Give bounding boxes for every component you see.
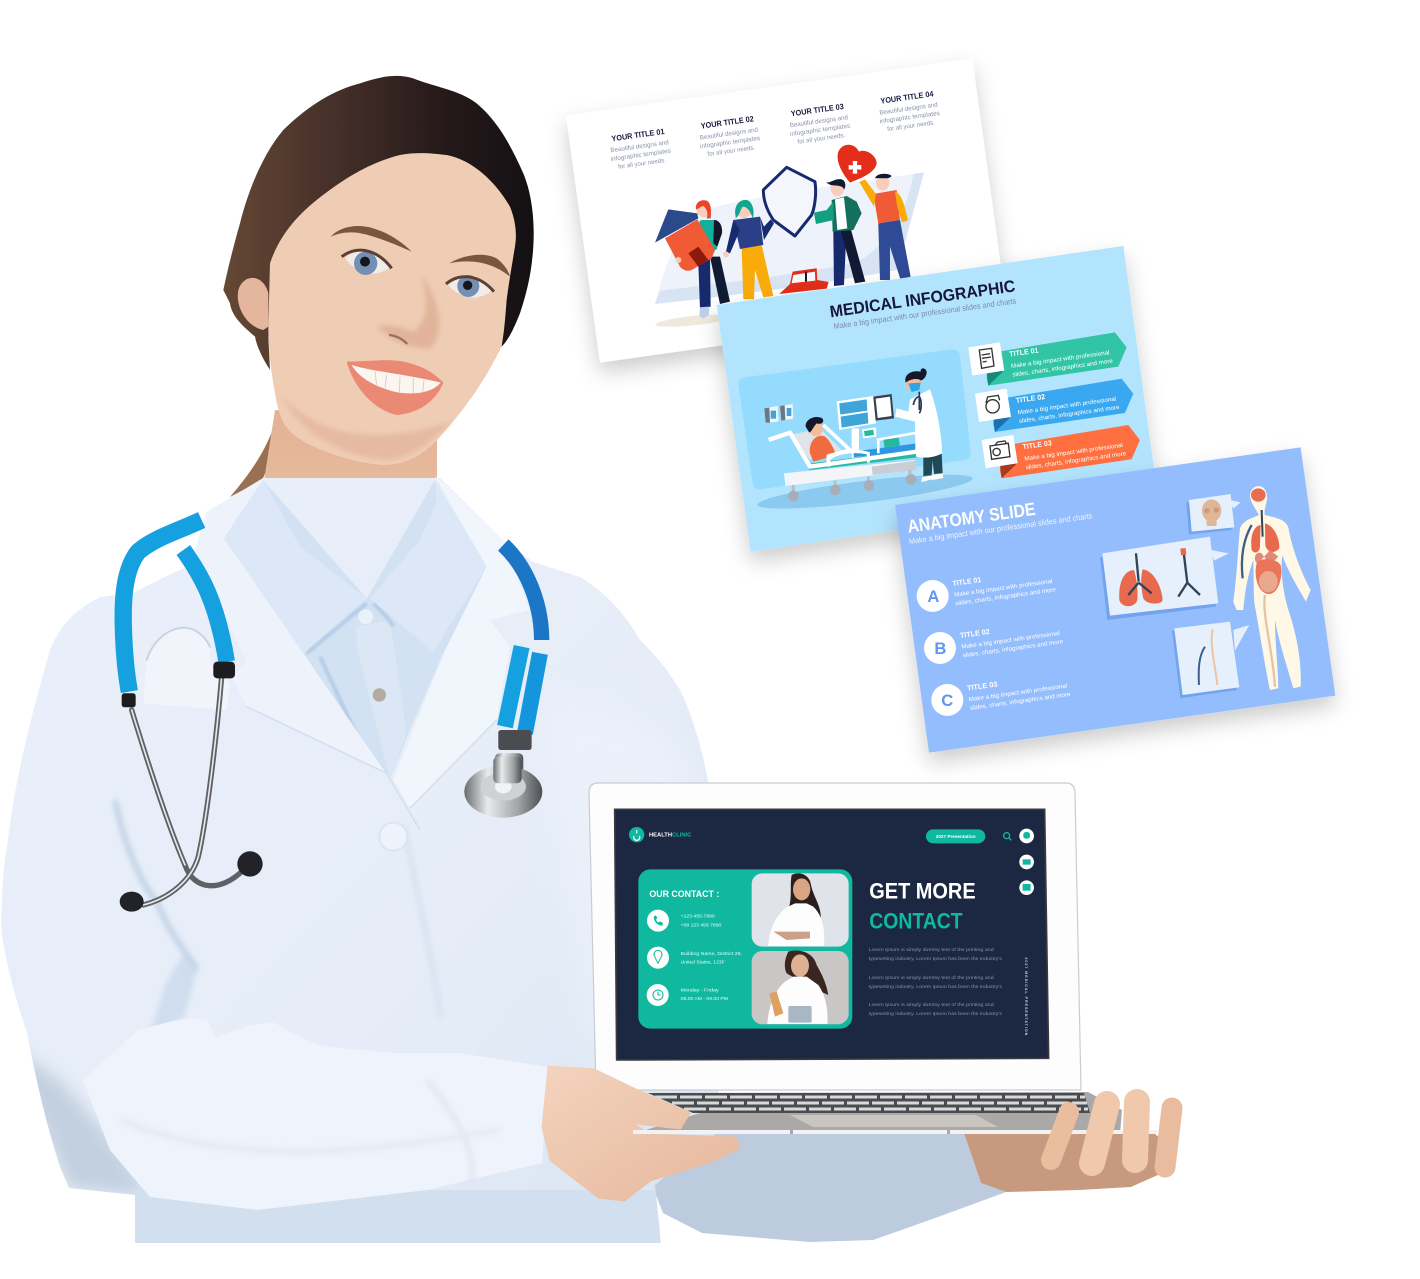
icon: phone <box>647 910 669 932</box>
icon: pin <box>647 947 669 969</box>
shirt folds <box>307 603 393 757</box>
illustration backdrop <box>745 356 964 483</box>
ponytail <box>230 423 278 497</box>
contact text: 08.00 AM - 09.00 PM <box>681 996 728 1002</box>
column titles and descriptions: for all your needs. <box>797 132 846 146</box>
face shading <box>280 393 453 460</box>
right palm <box>963 1130 1175 1192</box>
contact text: United States, 123F <box>681 960 725 966</box>
column titles and descriptions: infographic templates <box>879 110 940 125</box>
item A: slides, charts, infographics and more <box>955 587 1057 607</box>
panel: medical infographic slide <box>717 246 1157 552</box>
neck <box>263 410 437 598</box>
callout: veins <box>1172 622 1249 698</box>
item B: Make a big impact with professional <box>961 631 1060 651</box>
pill: presentation <box>926 829 985 843</box>
callout: title 01: Make a big impact with professional <box>1011 350 1110 370</box>
column titles and descriptions: YOUR TITLE 01 <box>611 127 666 143</box>
body text: Lorem Ipsum is simply dummy text of the printing and <box>869 975 994 981</box>
column titles and descriptions: Beautiful designs and <box>699 126 759 142</box>
lab coat <box>1 478 720 1243</box>
logo: HEALTHCLINIC <box>649 833 691 839</box>
icon: wall panels <box>764 404 793 423</box>
figure: woman holding house <box>655 200 730 319</box>
illustration: human body <box>1233 486 1311 690</box>
callout: title 02: TITLE 02 <box>1015 392 1046 405</box>
contact text: Monday - Friday <box>681 987 719 993</box>
contact text <box>681 914 742 1002</box>
item A: TITLE 01 <box>952 575 982 588</box>
photo: doctor arms crossed <box>752 873 849 947</box>
chest pocket bulge <box>143 628 230 710</box>
heading: get more contact <box>869 879 976 934</box>
icon: search <box>1004 833 1011 840</box>
shirt placket <box>357 620 407 780</box>
column titles and descriptions: Beautiful designs and <box>879 101 939 117</box>
panel: our contact: OUR CONTACT : <box>649 889 719 899</box>
panel: white slide with people and shield <box>566 58 1006 363</box>
laptop front lip <box>633 1130 1157 1134</box>
body text: typesetting industry. Lorem Ipsum has been the industry's <box>869 984 1002 990</box>
figure: doctor <box>0 76 1175 1243</box>
column titles and descriptions: for all your needs. <box>887 119 935 133</box>
icon buttons <box>1019 829 1034 895</box>
background swoosh <box>655 172 924 329</box>
icon: nurse outline <box>986 395 1000 413</box>
body text <box>869 947 1002 1017</box>
column titles and descriptions: Beautiful designs and <box>789 114 849 129</box>
icon: clock <box>647 984 669 1006</box>
eyebrows <box>331 226 510 277</box>
coat shading and folds <box>0 700 700 1243</box>
screen <box>615 809 1049 1060</box>
stethoscope <box>120 520 542 912</box>
item B: TITLE 02 <box>959 627 990 640</box>
column titles and descriptions: infographic templates <box>700 135 761 150</box>
column titles and descriptions: infographic templates <box>790 123 851 138</box>
photo: doctor with book <box>752 950 849 1024</box>
item C: slides, charts, infographics and more <box>970 692 1072 712</box>
heading: get more contact: GET MORE <box>869 879 976 904</box>
item A: Make a big impact with professional <box>954 579 1053 599</box>
column titles and descriptions: infographic templates <box>610 148 671 163</box>
right forearm sleeve <box>640 1120 1006 1242</box>
steel binaurals <box>132 677 243 905</box>
nose shading <box>377 273 439 348</box>
body text: typesetting industry. Lorem Ipsum has been the industry's <box>869 956 1002 962</box>
panel: anatomy slide <box>895 447 1335 753</box>
callout: title 03: TITLE 03 <box>1022 438 1052 451</box>
item A <box>917 575 1057 612</box>
black ear tips <box>120 892 144 912</box>
hair <box>223 76 534 370</box>
callout: title 02 <box>975 379 1133 432</box>
callout: title 01: slides, charts, infographics and more <box>1012 358 1114 379</box>
item C <box>931 679 1072 716</box>
item B <box>924 627 1064 664</box>
contact text: +123-456-7890 <box>681 914 715 920</box>
item A: A <box>927 587 939 606</box>
icon: report <box>979 348 994 368</box>
coat button <box>379 823 407 851</box>
callout: title 02: slides, charts, infographics and more <box>1019 405 1121 425</box>
subheading: Make a big impact with our professional slides and charts <box>833 296 1017 331</box>
coat collar right <box>393 477 530 808</box>
shirt <box>223 480 487 780</box>
column titles and descriptions: for all your needs. <box>707 144 756 158</box>
face <box>268 153 516 465</box>
lips and teeth <box>347 360 443 415</box>
item C: C <box>941 691 953 710</box>
illustration: hospital monitor <box>837 396 877 458</box>
laptop <box>589 783 1122 1134</box>
callout: skull <box>1186 494 1241 534</box>
callout: title 01 <box>968 332 1127 386</box>
item C: Make a big impact with professional <box>968 684 1068 703</box>
shirt buttons <box>358 609 386 702</box>
nostril <box>390 335 407 343</box>
black connectors <box>122 693 136 707</box>
ear <box>238 278 268 330</box>
coat collar edges <box>247 707 497 830</box>
column titles and descriptions: YOUR TITLE 02 <box>700 114 755 131</box>
column titles and descriptions <box>607 89 942 172</box>
callout: lungs <box>1100 537 1229 620</box>
subheading: Make a big impact with our professional slides and charts <box>908 511 1093 546</box>
icon: camera outline <box>990 441 1010 459</box>
heading: get more contact: CONTACT <box>869 909 963 934</box>
item C: TITLE 03 <box>966 679 998 693</box>
figure: man in orange vest <box>859 174 911 280</box>
base <box>633 1092 1122 1134</box>
coat collar left <box>195 478 392 782</box>
icon: red car <box>779 268 829 294</box>
figure: woman with teal hair <box>723 200 774 299</box>
head <box>223 76 534 465</box>
logo <box>629 827 691 842</box>
callout: title 03: slides, charts, infographics and more <box>1025 451 1127 471</box>
column titles and descriptions: for all your needs. <box>618 157 666 171</box>
column titles and descriptions: Beautiful designs and <box>610 139 670 154</box>
body text: Lorem Ipsum is simply dummy text of the printing and <box>869 947 994 953</box>
column titles and descriptions: YOUR TITLE 03 <box>790 102 845 118</box>
contact text: Building Name, District 28, <box>681 951 742 957</box>
column titles and descriptions: YOUR TITLE 04 <box>880 89 934 106</box>
left hand <box>543 1067 738 1200</box>
item B: B <box>934 639 946 658</box>
heading: MEDICAL INFOGRAPHIC <box>829 276 1016 321</box>
illustration: doctor with clipboard <box>873 368 943 482</box>
heading: ANATOMY SLIDE <box>906 499 1037 537</box>
floor shadow <box>756 468 974 515</box>
icon: red heart with cross <box>838 145 877 183</box>
panel: our contact <box>638 869 852 1029</box>
callout: title 01: TITLE 01 <box>1009 346 1039 359</box>
callout: title 03 <box>982 425 1140 478</box>
illustration: patient in bed <box>769 417 917 501</box>
vertical label: 2027 MEDICAL PRESENTATION <box>1024 957 1028 1036</box>
shirt collar <box>224 480 487 653</box>
icon: shield <box>763 167 816 236</box>
body text: typesetting industry. Lorem Ipsum has been the industry's <box>869 1011 1002 1017</box>
body text: Lorem Ipsum is simply dummy text of the printing and <box>869 1002 994 1008</box>
blue tubing <box>123 520 202 692</box>
contact text: +08 123 456 7890 <box>681 922 722 928</box>
clear tube <box>147 628 210 660</box>
callout: title 02: Make a big impact with professional <box>1017 397 1117 416</box>
item B: slides, charts, infographics and more <box>962 639 1064 659</box>
chest piece <box>498 730 532 750</box>
right hand fingers <box>1051 1102 1172 1167</box>
pill: presentation: 2027 Presentation <box>936 834 976 839</box>
callout: title 03: Make a big impact with professional <box>1024 443 1123 463</box>
figure: man in green jacket <box>814 179 865 286</box>
lid <box>589 783 1081 1090</box>
eyes <box>342 250 494 298</box>
